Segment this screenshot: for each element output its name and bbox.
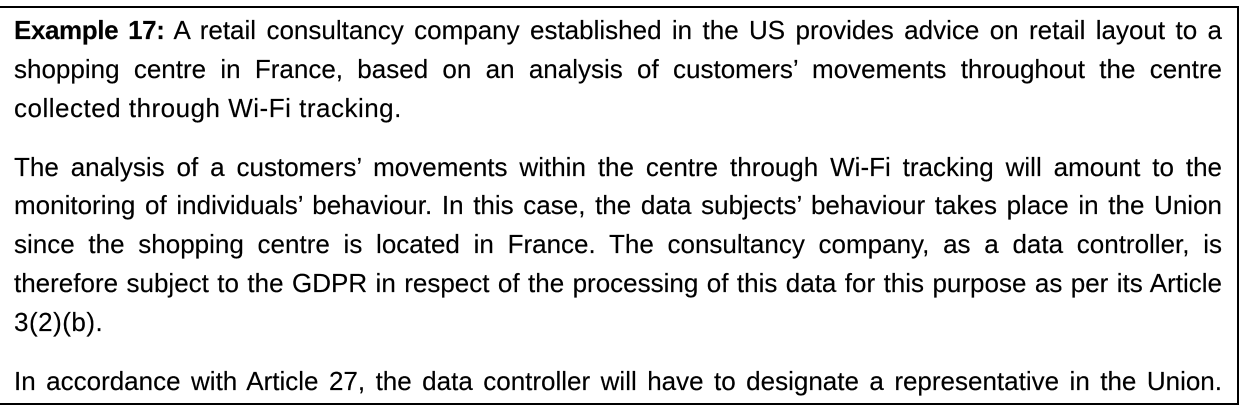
text block: example scenario bbox=[14, 15, 1222, 123]
text block: example scenario: collected through Wi-Fi tracking. bbox=[14, 93, 402, 123]
text block: analysis: since the shopping centre is located in France. The consultancy company, as a data controller, is bbox=[14, 229, 1222, 259]
text block: analysis: 3(2)(b). bbox=[14, 307, 103, 337]
text block: analysis: The analysis of a customers’ movements within the centre through Wi-Fi tracking will amount to the bbox=[14, 152, 1222, 182]
text block: analysis bbox=[14, 152, 1222, 337]
text block: analysis: monitoring of individuals’ behaviour. In this case, the data subjects’ behaviour takes place in the Union bbox=[14, 190, 1222, 220]
text block: conclusion: In accordance with Article 27, the data controller will have to designate a representative in the Union. bbox=[14, 366, 1222, 396]
text block: example scenario: shopping centre in France, based on an analysis of customers’ movements throughout the centre bbox=[14, 54, 1222, 84]
text block: analysis: therefore subject to the GDPR in respect of the processing of this data for this purpose as per its Article bbox=[14, 268, 1222, 298]
text block: example scenario: Example 17: A retail consultancy company established in the US provides advice on retail layout to a bbox=[14, 15, 1222, 45]
